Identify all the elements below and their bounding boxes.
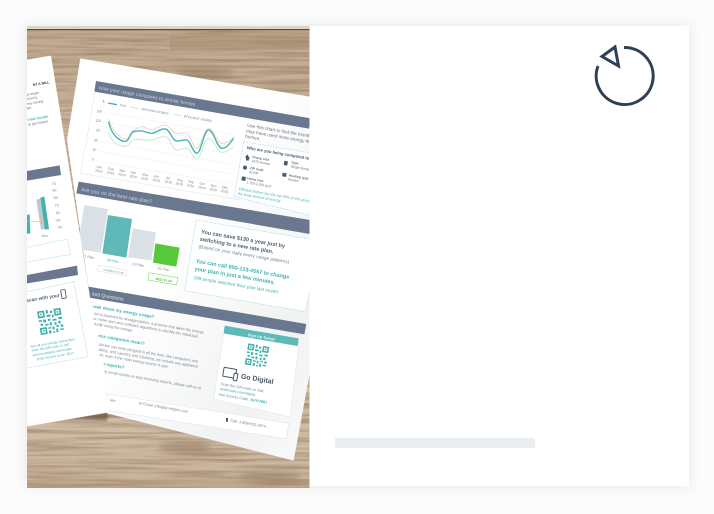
x axis labels: Jun: [153, 174, 159, 179]
FAQ questions: [92, 304, 155, 370]
bars: [25, 214, 30, 234]
FAQ answers: ur meter and uses software algorithms to identify the individual: [93, 317, 198, 339]
bar labels: C3 Plan: [132, 262, 145, 268]
intro copy: to get instant: [28, 119, 48, 127]
social proof: 188 people switched their plan last month: [193, 275, 279, 295]
best plan button: BEST PLAN: [155, 277, 173, 284]
section heading: How your usage compares to similar homes: [98, 85, 196, 108]
bar labels: B3 Plan: [107, 258, 120, 264]
x axis labels: Feb: [108, 167, 114, 172]
shadow under sheets: [60, 411, 109, 421]
scan instructions: www.smartgrid.com/mobile: [32, 347, 72, 357]
y axis labels: [52, 182, 62, 230]
intro copy: ney saving: [27, 99, 44, 106]
B3 plan bar: [102, 215, 132, 258]
usage band: [25, 165, 61, 181]
y axis labels: $: [103, 99, 105, 103]
comparison facts: Type: [291, 160, 299, 166]
x axis labels: Jul: [165, 176, 170, 180]
go digital instructions: [218, 382, 268, 405]
average homes line: [109, 119, 234, 148]
legend: AVERAGE HOMES: [141, 107, 169, 116]
wood table background: [27, 26, 310, 488]
y axis labels: 0: [92, 157, 94, 161]
comparison facts: Electric: [288, 177, 300, 183]
efficient homes line: [108, 132, 234, 159]
x axis labels: Sep: [188, 179, 194, 184]
savings headline: switching to a new rate plan.: [199, 237, 274, 255]
FAQ answers: ctually using the energy.: [92, 322, 133, 333]
comparison facts: [246, 155, 310, 189]
section: usage comparison: [80, 81, 325, 215]
QR code: [37, 308, 64, 335]
FAQ questions: nce categories mean?: [98, 333, 145, 346]
FAQ answers: ion is powered by disaggregation, a process that takes the energy: [93, 312, 204, 335]
scan instructions: Scan the QR-code or visit: [31, 342, 69, 353]
y axis labels: 70: [52, 182, 56, 186]
x axis labels: May: [142, 172, 149, 177]
contact box: wer: [109, 398, 117, 403]
photo: documents on wooden table: [25, 26, 325, 488]
savings note: (Based on your daily every usage patterns): [198, 244, 290, 266]
x axis labels: 2019: [209, 187, 217, 192]
call to action: You can call 800-123-4567 to change: [195, 259, 290, 281]
y axis labels: [92, 99, 105, 161]
contact box: Call: 1-808-632-3674: [230, 419, 267, 429]
y axis labels: 40: [58, 226, 62, 230]
sign up band: [224, 326, 299, 346]
intro copy: [27, 80, 50, 127]
legend: [108, 103, 212, 123]
scan box: [25, 282, 88, 368]
y axis labels: 120: [95, 119, 101, 123]
intro copy: ips: [27, 106, 32, 110]
x axis labels: 2019: [140, 176, 149, 181]
section: frequently asked questions: [85, 286, 306, 417]
chart explanation: Use this chart to find the months you: [247, 123, 323, 141]
go digital heading: Go Digital: [240, 373, 274, 386]
best plan bar: [153, 243, 180, 267]
you line: [109, 122, 234, 153]
intro copy: g usage: [27, 91, 39, 97]
FAQ heading: ked Questions: [92, 291, 125, 303]
FAQ answers: ant, even if the main energy source is gas.: [97, 353, 169, 369]
x axis labels: 2019: [186, 183, 195, 188]
pie outline: [596, 47, 653, 104]
month label: Dec: [42, 234, 48, 238]
bar labels: [84, 254, 170, 272]
legend: EFFICIENT HOMES: [183, 114, 212, 123]
placeholder text bar: [335, 438, 535, 448]
x axis labels: Nov: [210, 183, 217, 188]
intro copy: NT A BILL: [33, 80, 50, 87]
x axis labels: 2019: [95, 169, 103, 174]
current plan bar: [77, 205, 108, 253]
house, zip, size, type and heating icons: [241, 154, 288, 181]
QR code: [245, 343, 269, 368]
FAQ answers: ly email reports or stop receiving reports, please call us at: [104, 370, 202, 390]
section band: FAQ: [85, 286, 306, 334]
x axis labels: 2019: [152, 178, 160, 183]
scan instructions: [30, 337, 75, 361]
sign up frame: [214, 333, 299, 417]
section: best rate plan: [76, 182, 320, 312]
pie wedge: [602, 47, 618, 66]
comparison facts: Single family: [290, 164, 310, 172]
contact box: ✉ Email: info@smetgpro.com: [138, 401, 189, 414]
x axis labels: 2019: [164, 180, 172, 185]
y axis labels: 70: [55, 204, 59, 208]
trend line: [25, 221, 44, 222]
FAQ questions: r reports?: [103, 361, 125, 370]
comparison facts: ZIP code: [249, 166, 264, 172]
y axis labels: 60: [56, 211, 60, 215]
bar labels: $1 Plan: [157, 266, 170, 272]
scan instructions: See all you energy saving tips!: [30, 337, 75, 349]
y axis labels: 90: [96, 129, 100, 133]
sheet paper: [67, 58, 310, 461]
callout title: Who are you being compared to?: [246, 145, 313, 161]
contact box: [106, 394, 289, 439]
scan heading: Scan with your: [25, 293, 60, 304]
x axis labels: 2019: [198, 185, 206, 190]
FAQ questions: wak down my energy usage?: [92, 304, 155, 319]
y axis labels: 60: [94, 138, 98, 142]
go digital instructions: Scan the QR-code or visit: [220, 382, 265, 394]
y axis labels: 50: [56, 218, 60, 222]
icon: phone: [61, 289, 66, 299]
x axis labels: Aug: [176, 178, 183, 183]
chart explanation: may have used more energy than: [246, 128, 315, 145]
main sheet: [67, 58, 325, 461]
rate plan bars: [77, 205, 180, 285]
section heading: Are you on the best rate plan?: [81, 187, 153, 205]
y axis labels: 30: [93, 148, 97, 152]
chart frame: [80, 92, 240, 200]
x axis labels: Oct: [199, 181, 205, 186]
scan band: [25, 266, 78, 284]
callout footnote: Efficient homes are the top 20% in this group that use: [238, 187, 325, 206]
y axis labels: 100: [97, 109, 102, 113]
paper documents: [25, 56, 325, 461]
comparison facts: 02200: [249, 170, 259, 176]
photo and icon artwork: [27, 26, 655, 488]
x axis labels: 2019: [129, 174, 137, 179]
line chart: [92, 99, 237, 194]
icon: devices: [223, 367, 238, 381]
x axis labels: [95, 165, 229, 194]
x axis labels: 2019: [220, 189, 229, 194]
x axis labels: 2019: [175, 182, 183, 187]
comparison facts: Home size: [247, 176, 264, 183]
x axis labels: 2019: [106, 171, 115, 176]
comparison callout box: [234, 142, 325, 215]
sign up panel: [214, 326, 299, 417]
FAQ answers: device you keep plugged in all the time, like computers and: [99, 343, 198, 364]
comparison facts: Group size: [252, 155, 270, 162]
comparison facts: 1475 Homes: [251, 159, 271, 166]
second sheet paper: [25, 56, 109, 427]
sign up heading: Sign Up Today!: [247, 333, 276, 342]
bar chart fragment: [25, 182, 62, 238]
callout footnote: the least amount of energy: [237, 192, 281, 203]
savings callout border: [185, 220, 320, 312]
go digital instructions: wattsmart.com/digital: [219, 387, 256, 397]
savings headline: You can save $130 a year just by: [201, 229, 286, 250]
current plan button: CURRENT PLAN: [103, 268, 124, 275]
FAQ answers: [92, 312, 204, 390]
y axis labels: 90: [52, 189, 56, 193]
intro copy: iciency,: [27, 95, 38, 101]
chart explanation: [245, 124, 310, 144]
bar labels: 1 Plan: [84, 254, 95, 260]
legend: YOU: [119, 103, 127, 108]
grid lines: [96, 112, 237, 184]
chart explanation: homes.: [245, 134, 261, 141]
callout footnote: [238, 188, 310, 203]
icon: pie chart: [596, 47, 653, 104]
x axis labels: Jan: [96, 165, 102, 170]
call to action: your plan in just a few minutes.: [194, 266, 276, 286]
x axis labels: 2019: [118, 172, 126, 177]
scan box border: [25, 282, 88, 368]
section band: rate plan: [76, 182, 310, 234]
savings callout: [185, 220, 320, 312]
comparison facts: Heating type: [288, 173, 309, 181]
go digital instructions: Use Access Code: SUVVWU: [218, 392, 268, 405]
callout border: [234, 141, 310, 216]
scan instructions: Enter Access Code: 3617: [37, 351, 74, 361]
x axis labels: Mar: [119, 168, 125, 173]
x axis labels: Apr: [130, 170, 136, 175]
x axis labels: Dec: [222, 185, 228, 190]
dashed box fragment: [25, 239, 70, 262]
second sheet: [25, 56, 109, 427]
comparison facts: 1,750-2,250 sq ft: [246, 180, 272, 189]
y axis labels: 80: [54, 196, 58, 200]
FAQ answers: oking, and Laundry and Cleaning, we include any appliance: [98, 348, 198, 369]
C3 plan bar: [128, 228, 156, 260]
intro copy: t last month!: [27, 115, 48, 122]
section band: usage comparison: [94, 81, 310, 129]
